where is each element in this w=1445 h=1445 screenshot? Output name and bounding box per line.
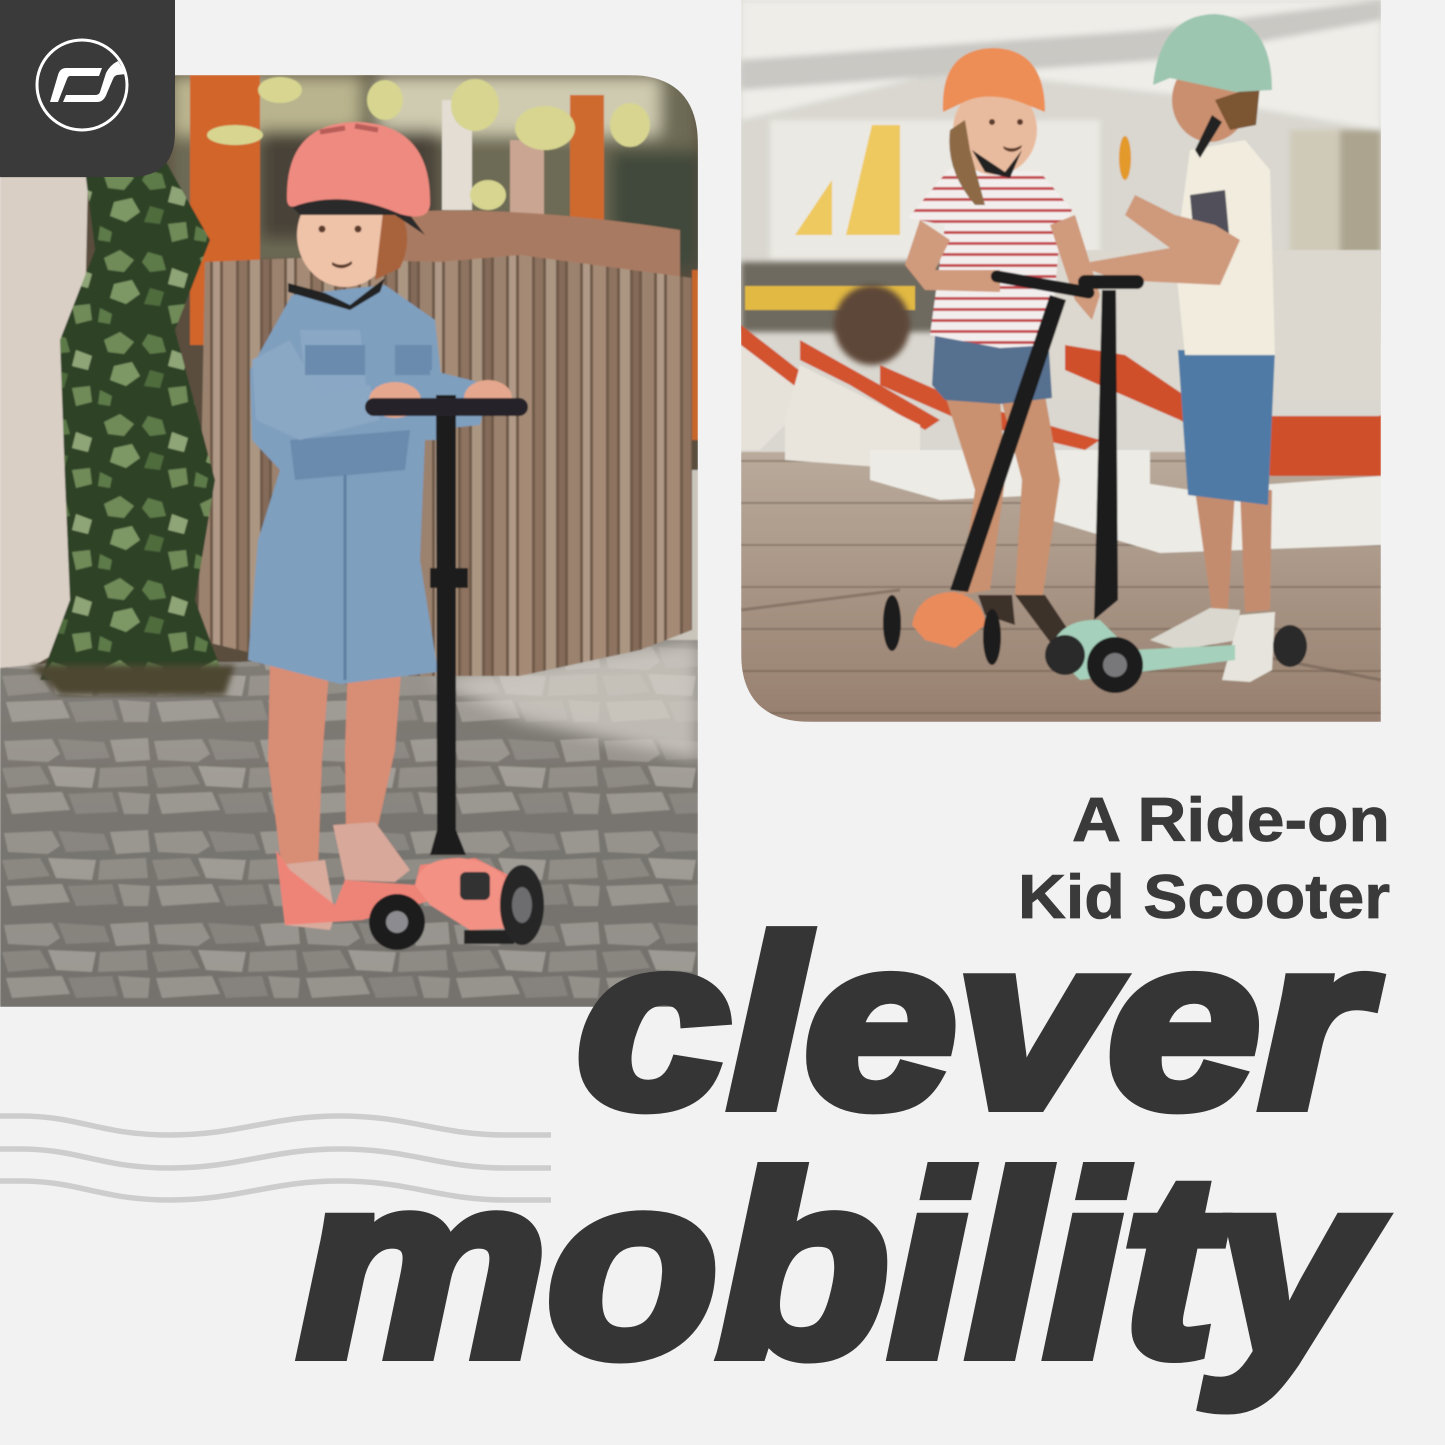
mint scooter (1045, 275, 1307, 693)
subheading (1018, 786, 1390, 932)
photo: girl with pink scooter (0, 75, 700, 1007)
headline (298, 889, 1386, 1411)
left kid facial features (989, 119, 1023, 152)
ivy (30, 160, 235, 695)
dress (248, 285, 448, 684)
white wall (0, 177, 88, 668)
right kid shirt (1175, 140, 1275, 355)
girl legs (268, 660, 330, 870)
orange scooter (883, 269, 1095, 665)
helmet (287, 122, 430, 217)
left kid face (953, 85, 1037, 175)
mint helmet (1153, 14, 1272, 92)
right kid legs (1195, 490, 1235, 610)
strap (288, 278, 385, 310)
loungers (741, 325, 1381, 553)
right kid shorts (1178, 350, 1275, 505)
leaves (207, 77, 650, 210)
left kid arms (905, 220, 1000, 292)
burlap behind fence (402, 210, 681, 277)
decorative wavy lines (0, 1116, 551, 1200)
left kid shirt (908, 168, 1072, 348)
shoes (286, 859, 334, 931)
logo block (0, 0, 175, 177)
right kid head (1171, 78, 1240, 143)
icon: brand circle mark (37, 40, 127, 130)
headline: mobility (298, 1121, 1386, 1411)
ice lolly (1119, 136, 1131, 180)
orange helmet (943, 48, 1045, 112)
left kid shorts (932, 335, 1052, 404)
arm and hands (430, 370, 483, 428)
yellow wall (846, 125, 900, 235)
photo: two kids with scooters (741, 0, 1381, 722)
scooter pink (276, 395, 544, 950)
fence (198, 255, 692, 676)
umbrellas (741, 0, 1381, 340)
shoes (1150, 608, 1240, 650)
deck (741, 452, 1381, 722)
right kid arm (1090, 195, 1240, 285)
facial features (318, 226, 362, 268)
back area (741, 262, 981, 332)
left kid legs (945, 395, 1005, 595)
face and hair (296, 214, 384, 288)
orange posts (190, 75, 604, 345)
dress pockets (305, 345, 432, 375)
subheading: Kid Scooter (1018, 863, 1390, 932)
ground (0, 630, 698, 1007)
subheading: A Ride-on (1072, 786, 1390, 855)
headline: clever (577, 889, 1379, 1157)
